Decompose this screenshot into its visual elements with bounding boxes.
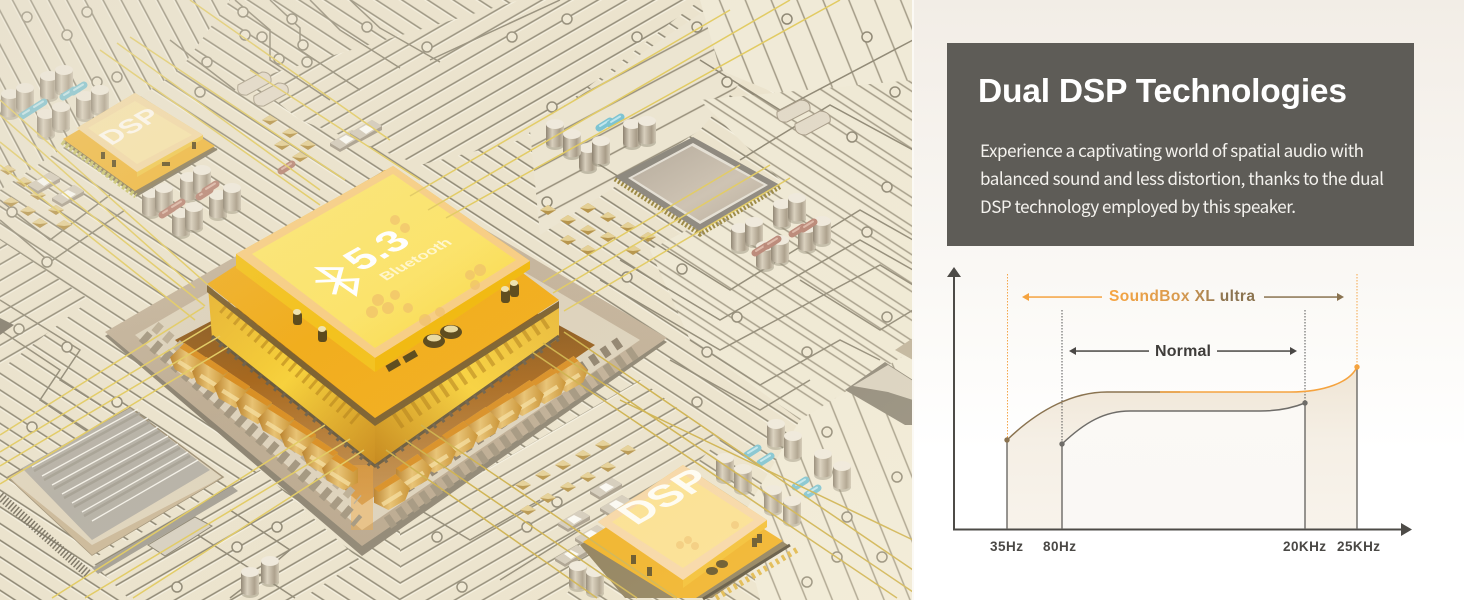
curve: SoundBox XL ultra bbox=[1004, 364, 1360, 443]
panel: right side background bbox=[913, 0, 1464, 600]
axis labels bbox=[990, 539, 1380, 554]
pin rows bbox=[143, 326, 635, 525]
heat sink bbox=[0, 408, 238, 574]
base plate bbox=[105, 170, 667, 556]
chip: lower right DSP bbox=[580, 462, 800, 599]
body text: DSP technology employed by this speaker. bbox=[980, 193, 1296, 218]
coil row bbox=[170, 343, 588, 510]
glass slab bbox=[236, 166, 530, 372]
area: SoundBox XL ultra range bbox=[1007, 367, 1357, 529]
yellow bonding wires bbox=[0, 0, 913, 598]
heading: Bluetooth 5.3: 5.3 bbox=[333, 223, 420, 277]
trace regions of the circuit board bbox=[0, 0, 913, 600]
icon: Bluetooth symbol bbox=[307, 262, 367, 300]
arrow: Normal left bbox=[1069, 347, 1149, 355]
body text: balanced sound and less distortion, thanks to the dual bbox=[980, 165, 1384, 190]
body text: Experience a captivating world of spatial audio with bbox=[980, 137, 1364, 162]
board components in front of glass bbox=[293, 280, 519, 372]
upper right gray chip bbox=[615, 137, 781, 234]
crystal oscillators bbox=[238, 72, 830, 135]
heading: Bluetooth 5.3 bbox=[307, 223, 456, 300]
capacitors and resistors, upper left group bbox=[1, 65, 292, 239]
panel: text box bbox=[947, 43, 1414, 246]
glowing layer bbox=[208, 286, 559, 468]
small surface parts, center bottom and upper right bbox=[515, 203, 656, 567]
label: Normal: Normal bbox=[1155, 343, 1211, 360]
axis labels: 20KHz bbox=[1283, 539, 1326, 554]
axis labels: 35Hz bbox=[990, 539, 1023, 554]
main chip assembly bbox=[105, 166, 667, 556]
curve: normal bbox=[1059, 400, 1308, 447]
area: normal range bbox=[1062, 403, 1305, 529]
vertical bars bbox=[1007, 367, 1357, 529]
arrow: SoundBox right bbox=[1264, 293, 1344, 301]
arrow: Normal right bbox=[1217, 347, 1297, 355]
divider bbox=[912, 0, 914, 600]
dotted guide lines bbox=[1008, 274, 1357, 444]
label: SoundBox XL ultra: SoundBox XL ultra bbox=[1109, 288, 1255, 305]
capacitors and resistors, lower right group bbox=[241, 419, 851, 598]
small surface parts, upper left bbox=[0, 115, 382, 230]
capacitors and resistors, upper right group bbox=[546, 116, 831, 272]
heading: Dual DSP Technologies bbox=[978, 73, 1347, 110]
right edge module bbox=[0, 318, 913, 425]
chip: upper left DSP bbox=[62, 93, 217, 196]
axis labels: 25KHz bbox=[1337, 539, 1380, 554]
bent circuit traces bbox=[0, 0, 913, 598]
label: DSP: DSP bbox=[92, 103, 167, 149]
axis labels: 80Hz bbox=[1043, 539, 1076, 554]
faint circuit dots on glass bbox=[366, 215, 486, 326]
heading: Bluetooth 5.3: Bluetooth bbox=[376, 236, 456, 283]
axes bbox=[947, 267, 1412, 536]
chart: frequency response bbox=[947, 267, 1412, 554]
body text bbox=[980, 137, 1384, 218]
via pads bbox=[7, 7, 902, 592]
gold board bbox=[207, 170, 559, 426]
global lighting overlay bbox=[0, 0, 913, 600]
arrow: SoundBox left bbox=[1022, 293, 1102, 301]
label: DSP: DSP bbox=[608, 462, 722, 531]
panel: circuit board illustration bbox=[0, 0, 913, 600]
